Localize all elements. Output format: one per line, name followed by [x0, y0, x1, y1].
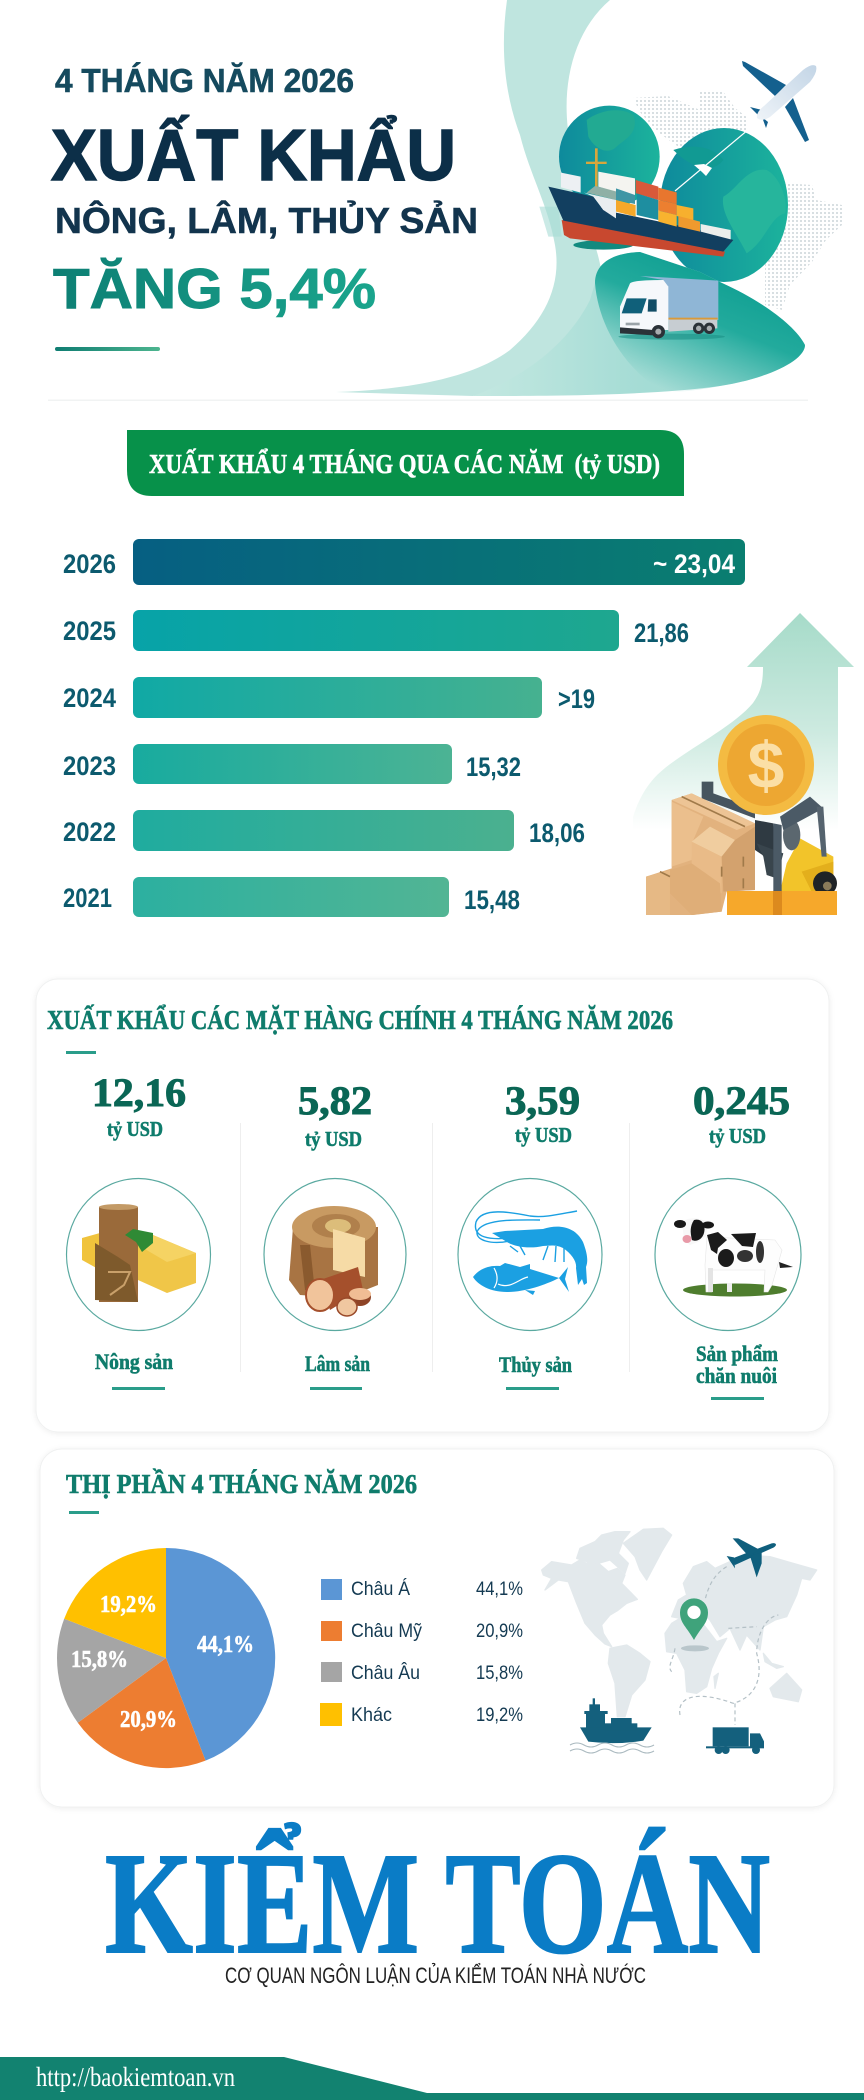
bar 2024: 2024: [63, 683, 116, 713]
item: thủy sản: [458, 1078, 602, 1390]
icon: container ship: [539, 148, 733, 257]
legend: 44,1%: [476, 1579, 523, 1600]
subtitle: nông lâm thủy sản: NÔNG, LÂM, THỦY SẢN: [55, 199, 478, 241]
panel heading: THỊ PHẦN 4 THÁNG NĂM 2026: [66, 1468, 417, 1499]
flight path line: [675, 124, 755, 191]
icon: white gull: [694, 164, 712, 176]
icon: plane: [742, 61, 816, 142]
dotted world map: [633, 90, 842, 310]
light teal swoosh: [336, 0, 610, 396]
item: thủy sản: 3,59: [505, 1078, 580, 1123]
logo tagline: CƠ QUAN NGÔN LUẬN CỦA KIỂM TOÁN NHÀ NƯỚC: [225, 1963, 646, 1988]
heading underline: [66, 1051, 96, 1054]
icon: plane: [727, 1538, 776, 1577]
coin: [718, 715, 814, 815]
hero illustration: [336, 0, 842, 396]
bar 2024: >19: [558, 684, 595, 714]
title: xuất khẩu: XUẤT KHẨU: [51, 115, 456, 196]
item: sản phẩm chăn nuôi: [655, 1078, 801, 1400]
legend: [320, 1579, 523, 1726]
section header pill: [127, 430, 684, 496]
legend: 19,2%: [476, 1705, 523, 1726]
growth arrow: [633, 613, 854, 830]
bar 2023: [63, 744, 521, 784]
bar 2026: 2026: [63, 549, 116, 579]
pie chart: 44,1%: [197, 1632, 254, 1658]
legend: Châu Âu: [351, 1662, 420, 1684]
legend: Khác: [351, 1705, 392, 1726]
footer bar: [0, 2057, 864, 2100]
continents: [542, 1528, 817, 1717]
globes: [559, 106, 788, 282]
bar 2026: [63, 539, 745, 585]
item: lâm sản: 5,82: [298, 1078, 372, 1123]
bar 2022: 18,06: [529, 818, 585, 848]
icon: cargo ship: [570, 1698, 654, 1753]
item: lâm sản: Lâm sản: [305, 1351, 370, 1376]
icon: wood and hay: [66, 1178, 210, 1330]
pie chart: 19,2%: [100, 1592, 157, 1618]
bar 2022: 2022: [63, 817, 116, 847]
route lines: [670, 1567, 778, 1725]
icon: shrimp and fish: [458, 1178, 602, 1330]
icon: location pin: [680, 1598, 709, 1651]
legend: 15,8%: [476, 1663, 523, 1684]
world map with logistics icons: [542, 1528, 817, 1754]
pie chart: 15,8%: [71, 1647, 128, 1673]
lower teal road shape: [473, 252, 805, 396]
legend: Châu Mỹ: [351, 1621, 422, 1642]
bar 2022: [63, 810, 585, 851]
item: sản phẩm chăn nuôi: 0,245: [693, 1078, 790, 1123]
heading underline: [69, 1511, 99, 1514]
pie chart: 20,9%: [120, 1707, 177, 1733]
bar 2024: [63, 677, 595, 718]
item: nông sản: [66, 1070, 210, 1390]
orange box: [727, 891, 837, 915]
accent rule: [55, 347, 160, 351]
item: sản phẩm chăn nuôi: tỷ USD: [709, 1124, 766, 1148]
item: nông sản: tỷ USD: [107, 1117, 163, 1141]
bar chart: export by year: [63, 539, 745, 917]
item: thủy sản: Thủy sản: [499, 1352, 572, 1377]
item: lâm sản: tỷ USD: [305, 1127, 362, 1151]
bar 2021: [63, 877, 520, 917]
icon: growth arrow with coin and forklift: [633, 613, 854, 915]
coin: $: [748, 728, 784, 802]
heading: period: 4 THÁNG NĂM 2026: [55, 62, 354, 99]
legend: 20,9%: [476, 1621, 523, 1642]
section header pill: XUẤT KHẨU 4 THÁNG QUA CÁC NĂM (tỷ USD): [149, 448, 660, 479]
bar 2025: [63, 610, 689, 651]
growth headline: TĂNG 5,4%: [53, 257, 376, 321]
footer bar: http://baokiemtoan.vn: [36, 2062, 235, 2092]
bar 2025: 2025: [63, 616, 116, 646]
icon: tree stump and logs: [264, 1178, 406, 1330]
bar 2023: 2023: [63, 751, 116, 781]
item: sản phẩm chăn nuôi: chăn nuôi: [696, 1363, 777, 1388]
icon: cow: [655, 1178, 801, 1330]
bar 2021: 2021: [63, 883, 112, 913]
item: nông sản: Nông sản: [95, 1349, 173, 1374]
item: nông sản: 12,16: [92, 1070, 186, 1115]
pie chart: [57, 1548, 275, 1768]
bar 2021: 15,48: [464, 885, 520, 915]
item: lâm sản: [264, 1078, 406, 1390]
icon: delivery truck: [706, 1727, 764, 1754]
bar 2025: 21,86: [634, 618, 689, 648]
panel: main export commodities: [36, 979, 829, 1432]
forklift: [702, 782, 837, 895]
cardboard boxes: [646, 793, 755, 915]
icon: truck: [618, 276, 725, 340]
legend: Châu Á: [351, 1579, 410, 1600]
item: sản phẩm chăn nuôi: Sản phẩm: [696, 1341, 778, 1366]
bar 2026: ~ 23,04: [653, 549, 735, 579]
panel: market share: [40, 1449, 834, 1807]
bar 2023: 15,32: [466, 752, 521, 782]
item: thủy sản: tỷ USD: [515, 1123, 572, 1147]
panel heading: XUẤT KHẨU CÁC MẶT HÀNG CHÍNH 4 THÁNG NĂM 2026: [47, 1004, 673, 1035]
